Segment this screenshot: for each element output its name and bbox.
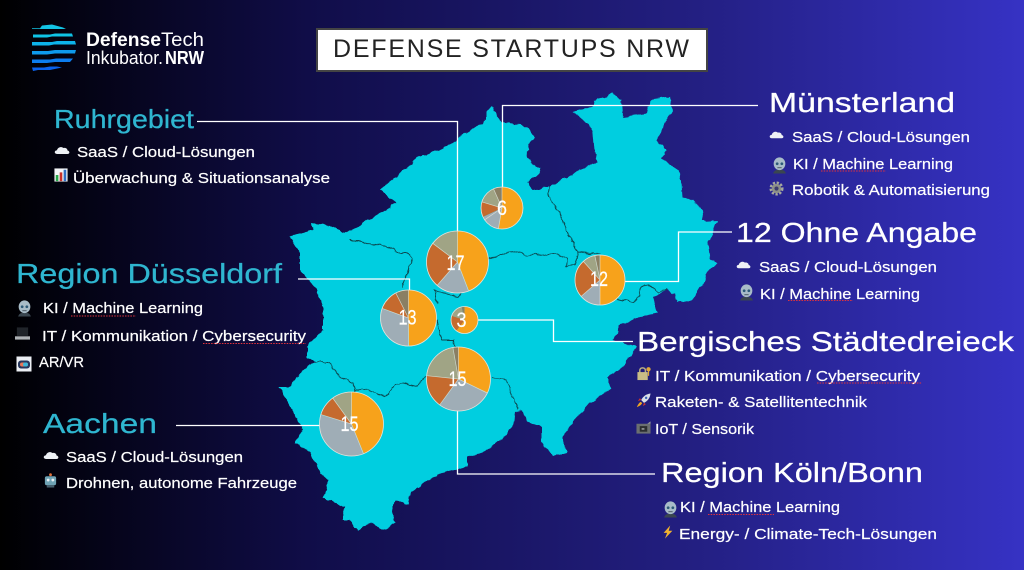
icon: cloud	[770, 132, 783, 138]
text: IT: IT / Kommunikation / Cybersecurity	[42, 328, 307, 345]
icon: AI head	[773, 157, 786, 174]
logo mark: striped globe	[32, 24, 76, 71]
icon: gear	[771, 183, 782, 194]
text: KI: KI / Machine Learning	[793, 156, 953, 173]
connector: Aachen	[176, 424, 320, 426]
text: IT: IT / Kommunikation / Cybersecurity	[655, 368, 921, 385]
icon: rocket	[637, 393, 651, 407]
text: KI: KI / Machine Learning	[680, 499, 840, 516]
icon: cloud	[44, 452, 58, 459]
pie: Ruhrgebiet 17: 17	[446, 252, 464, 275]
pie: Region Düsseldorf 13: 13	[398, 306, 416, 330]
icon: AI head	[740, 284, 753, 300]
pie: 12 Ohne Angabe	[575, 255, 625, 305]
heading: Aachen: Aachen	[43, 408, 157, 439]
pie: Aachen 15: 15	[340, 413, 358, 436]
text: SaaS: SaaS / Cloud-Lösungen	[77, 144, 255, 161]
connector: Region Düsseldorf	[298, 279, 410, 291]
pie: 12 Ohne Angabe: 12	[590, 268, 608, 291]
connector: Region Köln/Bonn	[458, 411, 655, 474]
panel: Region Düsseldorf	[15, 258, 307, 372]
icon: chart	[54, 168, 68, 182]
icon: AI head	[664, 501, 677, 518]
text: SaaS: SaaS / Cloud-Lösungen	[792, 129, 970, 146]
panel: Münsterland	[769, 87, 990, 199]
connector: 12 Ohne Angabe	[625, 232, 732, 282]
heading: Region Köln/Bonn: Region Köln/Bonn	[661, 457, 923, 488]
connector: Ruhrgebiet	[197, 122, 458, 232]
heading: 12 Ohne Angabe: 12 Ohne Angabe	[736, 217, 977, 248]
logo wordmark: Defense	[86, 29, 161, 51]
panel: Region Köln/Bonn	[661, 457, 937, 543]
pie: Region Köln/Bonn 15	[426, 347, 490, 411]
panel: Bergisches Städtedreieck	[636, 326, 1015, 438]
connector: Münsterland	[502, 106, 758, 188]
pie: Region Köln/Bonn 15: 15	[448, 368, 466, 391]
pie: Region Düsseldorf 13	[380, 290, 436, 346]
icon: robot	[45, 473, 56, 488]
map silhouette	[280, 93, 717, 530]
panel: Ruhrgebiet	[54, 104, 330, 187]
text: Drohnen: Drohnen, autonome Fahrzeuge	[66, 475, 297, 492]
logo: DefenseTech Inkubator.NRW: NRW	[165, 48, 204, 68]
text: Überwachung: Überwachung & Situationsanalyse	[73, 169, 330, 187]
text: Energy: Energy- / Climate-Tech-Lösungen	[679, 526, 937, 543]
logo wordmark: Tech	[161, 29, 204, 51]
text: KI: KI / Machine Learning	[760, 286, 920, 303]
pie: Münsterland 6	[481, 187, 523, 229]
title box: DEFENSE STARTUPS NRW	[333, 35, 689, 63]
icon: VR headset	[16, 356, 32, 372]
icon: lightning bolt	[664, 525, 672, 539]
text: SaaS: SaaS / Cloud-Lösungen	[759, 259, 937, 276]
title box	[317, 29, 707, 71]
text: Raketen: Raketen- & Satellitentechnik	[655, 394, 868, 411]
icon: lock	[637, 367, 651, 380]
text: SaaS: SaaS / Cloud-Lösungen	[66, 449, 243, 466]
text: Robotik: Robotik & Automatisierung	[792, 182, 990, 199]
heading: Münsterland: Münsterland	[769, 87, 955, 118]
heading: Region Düsseldorf: Region Düsseldorf	[16, 258, 282, 289]
text: AR/VR: AR/VR	[39, 354, 84, 371]
heading: Bergisches Städtedreieck: Bergisches Städtedreieck	[637, 326, 1015, 357]
icon: cloud	[737, 262, 750, 268]
pie: Münsterland 6: 6	[497, 197, 507, 220]
panel: 12 Ohne Angabe	[736, 217, 977, 303]
connector: Bergisches Städtedreieck	[478, 320, 633, 342]
icon: cloud	[55, 147, 69, 154]
heading: Ruhrgebiet: Ruhrgebiet	[54, 104, 195, 134]
icon: AI head	[18, 300, 31, 316]
text: KI: KI / Machine Learning	[43, 300, 203, 317]
pie: Bergisches Städtedreieck 3: 3	[456, 309, 466, 332]
map: North Rhine-Westphalia	[280, 93, 717, 530]
panel: Aachen	[43, 408, 297, 492]
pie: Bergisches Städtedreieck 3	[451, 306, 478, 334]
icon: camera	[636, 421, 651, 434]
pie: Aachen 15	[320, 392, 384, 456]
internal region borders	[315, 187, 667, 410]
icon: laptop	[15, 327, 30, 340]
pie: Ruhrgebiet 17	[426, 231, 488, 293]
logo: DefenseTech Inkubator.NRW: Inkubator.	[86, 48, 163, 68]
text: IoT: IoT / Sensorik	[655, 421, 755, 438]
logo: DefenseTech Inkubator.NRW	[32, 24, 204, 71]
